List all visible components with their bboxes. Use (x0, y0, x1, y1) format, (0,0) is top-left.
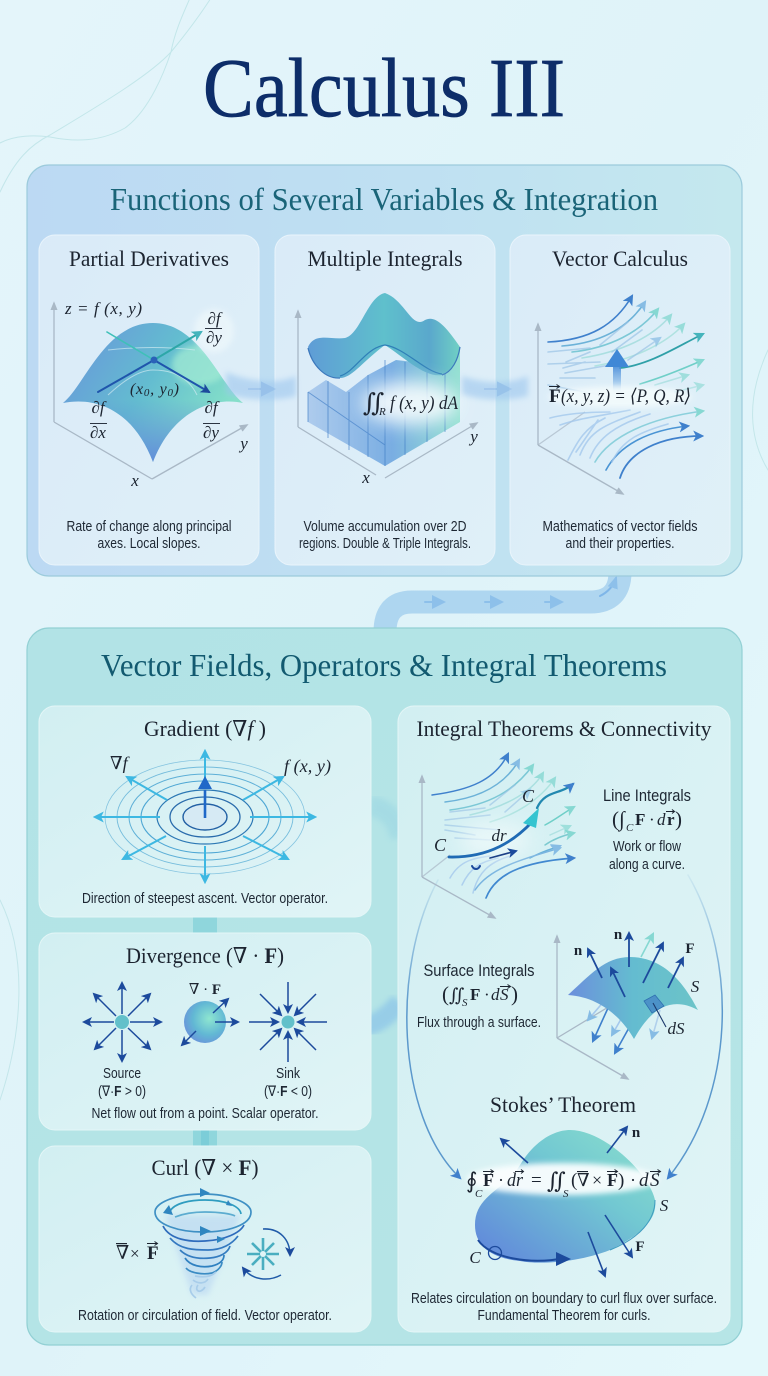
text: line integrals: Work or flow (613, 839, 681, 855)
caption: and their properties. (566, 536, 674, 552)
chart: contour map with gradient vectors: f (x, y) (284, 756, 331, 777)
icon: tornado: × (130, 1244, 140, 1263)
formula: Stokes: × (592, 1170, 602, 1190)
formula: Stokes: dr (507, 1170, 524, 1191)
card heading: Divergence (∇ · F) (126, 943, 284, 968)
chart: surface integral: dS (668, 1019, 685, 1038)
card heading: Gradient (∇f ) (144, 716, 266, 741)
text: surface integrals: F (470, 985, 480, 1004)
card: divergence (39, 933, 371, 1130)
heading: Stokes' theorem: Stokes’ Theorem (490, 1092, 636, 1117)
chart: line integral field (422, 754, 574, 918)
chart: tangent surface: (x (130, 381, 143, 398)
chart: tangent surface: ∂f (204, 398, 220, 417)
text: surface integrals: ∬ (449, 985, 465, 1005)
icon: divergence sphere (182, 982, 238, 1045)
chart: surface integral: F (685, 941, 695, 957)
text: line integrals: Line Integrals (603, 786, 691, 805)
chart: tangent surface: ∂x (90, 423, 106, 442)
chart: line integral field: C (522, 786, 535, 806)
formula: Stokes: S (650, 1170, 660, 1191)
chart: line integral field: C (434, 835, 447, 855)
text: line integrals: F (635, 810, 645, 829)
chart: volume under surface: ∬ (363, 390, 384, 417)
text: surface integrals: S (500, 985, 509, 1004)
caption (66, 519, 232, 552)
chart: contour map with gradient vectors: ∇f (110, 753, 131, 773)
caption (299, 519, 471, 552)
chart: surface integral: S (691, 977, 700, 996)
chart: Stokes surface: C (469, 1248, 481, 1267)
formula: Stokes: = (531, 1170, 542, 1191)
caption: Mathematics of vector fields (542, 519, 698, 535)
chart: tangent surface: z = f (x, y) (64, 299, 142, 318)
card: integral theorems (398, 706, 730, 1332)
chart: volume under surface (298, 293, 478, 487)
chart: tangent surface: x (130, 471, 139, 490)
formula: Stokes: · (630, 1170, 636, 1190)
formula: Stokes: S (563, 1188, 569, 1200)
chart: vector field: F (549, 386, 561, 407)
chart: tangent surface: ∂y (206, 328, 222, 347)
caption: Relates circulation on boundary to curl flux over surface. (411, 1291, 717, 1307)
chart: surface integral (557, 927, 700, 1079)
card heading: Vector Calculus (552, 246, 688, 271)
chart: tangent surface: ) (173, 381, 179, 398)
text: line integrals: ( (612, 807, 619, 831)
icon: tornado: ∇ (116, 1243, 129, 1264)
chart: tangent surface (54, 299, 248, 490)
formula: Stokes: ∮ (466, 1168, 477, 1193)
caption: Volume accumulation over 2D (304, 519, 466, 535)
arrow: line integrals to Stokes (407, 880, 460, 1178)
card heading: Partial Derivatives (69, 246, 229, 271)
chart: tangent surface: , y (150, 381, 168, 398)
caption: regions. Double & Triple Integrals. (299, 536, 471, 552)
caption: Net flow out from a point. Scalar operator. (92, 1106, 318, 1122)
card: vector calculus (510, 235, 730, 565)
card: curl (39, 1146, 371, 1332)
connector arrow: integrals to vector calculus (462, 376, 528, 400)
text: surface integrals: d (491, 985, 500, 1004)
icon: tornado: F (147, 1243, 159, 1264)
icon: source: (∇·F > 0) (98, 1084, 146, 1100)
formula: Stokes: d (639, 1170, 649, 1191)
card: partial derivatives (39, 235, 259, 565)
connectors between operator cards and theorem card (193, 806, 400, 1148)
chart: surface integral: n (574, 943, 583, 959)
panel heading: Vector Fields, Operators & Integral Theorems (101, 647, 667, 683)
text: line integrals: ∫ (617, 807, 626, 832)
chart: Stokes surface: S (660, 1196, 669, 1215)
icon: tornado (116, 1188, 251, 1298)
text: line integrals: along a curve. (609, 857, 685, 873)
text: line integrals: ) (675, 807, 682, 831)
icon: sink (249, 982, 327, 1100)
chart: tangent surface: ∂f (207, 309, 223, 328)
caption (542, 519, 698, 552)
title: Calculus III (203, 42, 565, 135)
caption: Rotation or circulation of field. Vector operator. (78, 1308, 332, 1324)
caption: Fundamental Theorem for curls. (478, 1308, 650, 1324)
chart: surface integral: n (614, 927, 623, 943)
chart: vector field (538, 296, 703, 494)
caption: Direction of steepest ascent. Vector operator. (82, 891, 328, 907)
formula: Stokes: ( (571, 1170, 577, 1191)
chart: Stokes surface (466, 1125, 669, 1276)
text: line integrals: r (667, 810, 675, 829)
chart: tangent surface: y (238, 434, 248, 453)
arrow: surface integrals to Stokes (668, 875, 722, 1178)
text: surface integrals: S (462, 997, 468, 1009)
text: line integrals: d (657, 810, 666, 829)
icon: sink: Sink (276, 1066, 301, 1082)
text: surface integrals: Flux through a surface. (417, 1015, 541, 1031)
card heading: Multiple Integrals (308, 246, 462, 271)
chart: vector field: (x, y, z) = ⟨P, Q, R⟩ (561, 386, 691, 407)
text: line integrals (603, 786, 691, 873)
caption: axes. Local slopes. (98, 536, 200, 552)
chart: volume under surface: x (361, 468, 370, 487)
caption: Rate of change along principal (66, 519, 232, 535)
formula: Stokes: C (475, 1188, 483, 1200)
chart: Stokes surface: n (632, 1125, 641, 1141)
icon: sink: (∇·F < 0) (264, 1084, 312, 1100)
formula: Stokes: F (483, 1170, 494, 1190)
text: surface integrals (417, 961, 541, 1031)
connector: between top and bottom panels (385, 560, 620, 632)
formula: Stokes: · (498, 1170, 504, 1190)
chart: volume under surface: R (378, 406, 386, 418)
icon: source (84, 983, 161, 1100)
chart: tangent surface: ∂f (91, 398, 107, 417)
panel: functions of several variables (27, 165, 742, 576)
icon: rotation (243, 1229, 290, 1279)
chart: line integral field: dr (491, 826, 507, 845)
text: surface integrals: ( (442, 982, 449, 1006)
text: surface integrals: · (484, 985, 490, 1004)
card: multiple integrals (275, 235, 495, 565)
card heading: Curl (∇ × F) (152, 1155, 258, 1180)
icon: divergence sphere: ∇ · F (189, 982, 221, 998)
formula: Stokes (466, 1168, 660, 1200)
formula: Stokes: ∬ (547, 1168, 566, 1193)
icon: source: Source (103, 1066, 141, 1082)
formula: Stokes: F (607, 1170, 618, 1190)
card: gradient (39, 706, 371, 917)
text: line integrals: · (649, 810, 655, 829)
caption (411, 1291, 717, 1324)
chart: tangent surface: 0 (144, 387, 150, 399)
panel: vector fields and theorems (27, 628, 742, 1345)
text: surface integrals: Surface Integrals (424, 961, 534, 980)
text: surface integrals: ) (511, 982, 518, 1006)
chart: tangent surface: 0 (167, 387, 173, 399)
formula: Stokes: ∇ (577, 1170, 590, 1190)
chart: contour map with gradient vectors (95, 751, 331, 882)
panel heading: Functions of Several Variables & Integration (110, 181, 658, 217)
chart: Stokes surface: F (635, 1239, 645, 1255)
chart: volume under surface: f (x, y) dA (390, 393, 458, 414)
chart: tangent surface: ∂y (203, 423, 219, 442)
connector arrow: derivatives to integrals (226, 372, 296, 400)
card heading: Integral Theorems & Connectivity (416, 716, 712, 741)
formula: Stokes: ) (618, 1170, 624, 1191)
text: line integrals: C (626, 822, 634, 834)
chart: volume under surface: y (468, 427, 478, 446)
